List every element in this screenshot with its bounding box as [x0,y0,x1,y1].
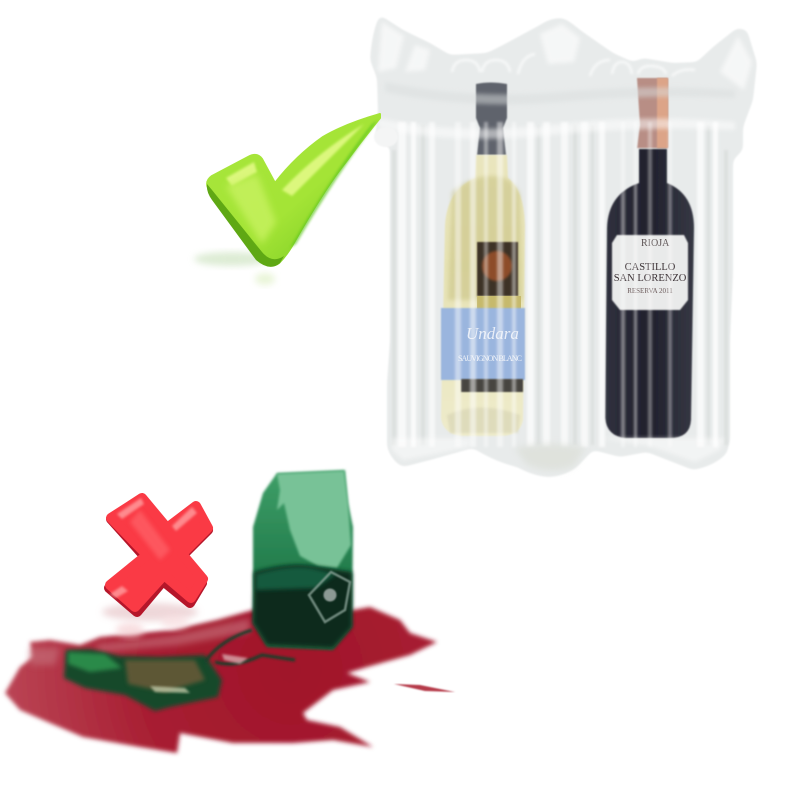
icon: red X mark [102,498,208,637]
white octagon label [612,235,688,310]
left side tube knob [374,127,398,147]
wine lighter upper pool [30,618,250,665]
wine inside [253,565,352,648]
X highlights [110,498,197,598]
white wine bottle [441,82,525,436]
inner light shard [277,471,351,568]
bottle glass [605,149,694,438]
white wine bottle: SAUVIGNON BLANC [458,354,522,363]
capsule [476,82,507,155]
glass shards [205,630,295,664]
gathered seam band [378,118,735,139]
blue label [441,308,525,380]
bottom air pockets [392,438,725,462]
red wine bottle [605,78,694,438]
dark strip [461,379,523,392]
bottle glass [441,155,525,436]
panel: incorrect packaging, broken wine bottle [5,470,455,753]
check shadow [194,252,270,266]
label text: RIOJA [641,238,670,249]
air bag body [370,15,757,477]
red wine bottle: CASTILLO [625,262,676,273]
red wine bottle: RESERVA 2011 [627,287,673,295]
watermark badge [309,572,350,622]
broken bottle neck on floor [64,630,295,711]
X shadow [102,603,198,621]
check body [207,114,380,265]
check highlights [226,124,364,196]
icon: green check mark [194,114,380,285]
ruffled top with scalloped air pockets [378,22,752,139]
bottle glass [253,470,353,650]
wine splash [394,684,455,692]
label text: Undara [466,324,519,343]
dark square label [477,242,518,296]
X body [109,499,208,612]
air column stripes [398,122,718,447]
pink capsule [637,78,668,148]
wine puddle [5,607,437,753]
panel: correct packaging, wine bottles in air column bag [370,15,757,477]
broken bottle upright [253,470,353,650]
grey tube seams [392,125,728,445]
check shaded lower-left edge [207,184,284,267]
red wine bottle: SAN LORENZO [614,273,687,284]
